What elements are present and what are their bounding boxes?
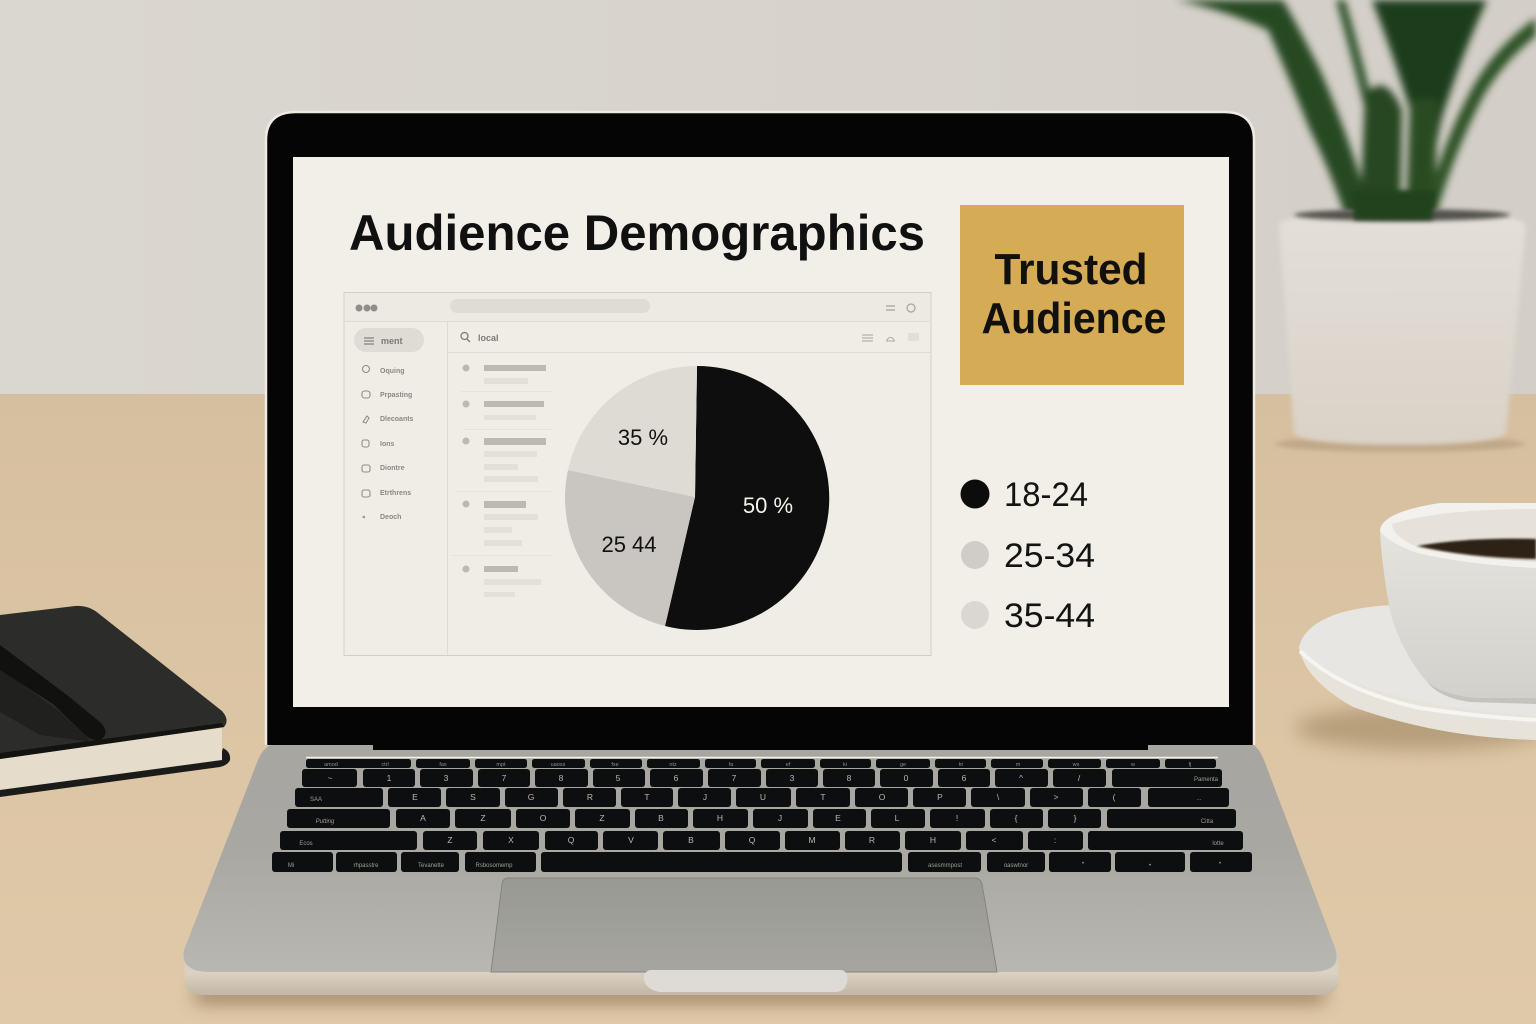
key legends: m — [1016, 762, 1021, 768]
key legends: ! — [956, 813, 958, 823]
sidebar items: Etrthrens — [380, 490, 411, 497]
sidebar items: Ions — [380, 441, 394, 448]
shift key row — [280, 831, 1243, 850]
key legends: mpt — [496, 762, 506, 768]
potted plant — [1176, 0, 1536, 452]
key legends: Ecos — [299, 841, 313, 847]
key legends: O — [879, 792, 886, 802]
pot shadow on desk — [1275, 436, 1525, 452]
key legends: P — [937, 792, 943, 802]
cup body — [1380, 530, 1536, 698]
key legends: fa — [729, 762, 734, 768]
pie chart: 25 44 — [601, 532, 657, 557]
key legends: V — [628, 835, 634, 845]
coffee cup and saucer — [1295, 503, 1536, 750]
trackpad front notch — [644, 970, 847, 992]
key legends: B — [688, 835, 694, 845]
plant stems at soil — [1352, 190, 1436, 220]
key legends: 8 — [559, 773, 564, 783]
key legends: ntz — [669, 762, 677, 768]
key legends: E — [412, 792, 418, 802]
key legends: } — [1074, 813, 1077, 823]
wooden desk surface — [0, 394, 1536, 1024]
pie chart: 35 % — [618, 425, 668, 450]
key legends: 6 — [962, 773, 967, 783]
key legends: 3 — [444, 773, 449, 783]
legend item 18-24: 18-24 — [1004, 476, 1088, 514]
toolbar icons — [886, 304, 915, 312]
badge: Trusted Audience: Trusted — [994, 245, 1148, 294]
key legends: { — [1015, 813, 1018, 823]
key legends: X — [508, 835, 514, 845]
badge: Trusted Audience — [960, 205, 1184, 385]
sidebar menu — [354, 328, 424, 352]
key legends: w — [1130, 762, 1135, 768]
key legends: rhpasstre — [353, 863, 379, 869]
plant leaves — [1176, 0, 1536, 220]
key legends: 7 — [732, 773, 737, 783]
key legends: • — [1082, 861, 1084, 867]
saucer underside — [1299, 605, 1536, 740]
sidebar items: Deoch — [380, 514, 401, 521]
key legends: uaoss — [551, 762, 566, 768]
slice: 35-44 — [568, 366, 697, 497]
coffee — [1417, 539, 1536, 559]
key legends: > — [1054, 792, 1059, 802]
key legends: Rsbosomemp — [475, 863, 513, 869]
key legends: E — [835, 813, 841, 823]
key legends: Z — [447, 835, 453, 845]
slice: 18-24 — [665, 366, 829, 630]
notebook lower cover — [0, 748, 230, 797]
key legends: fas — [439, 762, 447, 768]
search bar: local — [478, 333, 499, 343]
key legends: < — [992, 835, 997, 845]
badge: Trusted Audience: Audience — [982, 294, 1166, 343]
panel: faded app window — [344, 292, 931, 656]
key legends: B — [658, 813, 664, 823]
key legends: ^ — [1019, 773, 1023, 783]
laptop screen — [293, 157, 1229, 707]
pie chart: 50 % — [743, 493, 793, 518]
sidebar items: Dlecoants — [380, 416, 414, 423]
key legends: J — [778, 813, 782, 823]
address bar — [450, 299, 650, 313]
legend item 35-44 — [961, 597, 1095, 635]
function key row — [306, 759, 1216, 768]
key legends: fxe — [611, 762, 619, 768]
key legends: Z — [599, 813, 605, 823]
key legends: ws — [1072, 762, 1080, 768]
bottom key row — [272, 852, 1252, 872]
qwerty key row — [295, 788, 1229, 807]
key legends — [288, 762, 1224, 869]
key legends: ... — [1196, 796, 1202, 802]
legend item 18-24 — [960, 476, 1088, 514]
sidebar items: Prpasting — [380, 392, 412, 399]
home key row — [287, 809, 1236, 828]
key legends: : — [1054, 835, 1056, 845]
key legends: amod — [324, 762, 338, 768]
key legends: tri — [959, 762, 963, 768]
key legends: R — [587, 792, 593, 802]
wall background — [0, 0, 1536, 396]
legend item 35-44: 35-44 — [1004, 597, 1095, 635]
saucer shadow — [1295, 706, 1536, 750]
key legends: M — [808, 835, 816, 845]
key legends: ctrl — [381, 762, 389, 768]
cup contact shadow — [1427, 682, 1536, 704]
key legends: 1 — [387, 773, 392, 783]
key legends: Q — [749, 835, 756, 845]
key legends: Citta — [1201, 819, 1214, 825]
key legends: oaswtnor — [1004, 863, 1028, 869]
key legends: ( — [1113, 792, 1116, 802]
sidebar items — [362, 366, 414, 521]
key legends: asesmmpost — [928, 863, 962, 869]
laptop shadow — [195, 988, 1325, 1002]
key legends: / — [1078, 773, 1081, 783]
key legends: ge — [900, 762, 906, 768]
trackpad — [491, 878, 997, 972]
laptop lid — [266, 112, 1254, 750]
notebook pages — [0, 728, 222, 790]
key legends: L — [895, 813, 900, 823]
saucer lip — [1300, 651, 1536, 720]
pen — [0, 645, 105, 742]
keyboard — [272, 758, 1252, 872]
key legends: Mi — [288, 863, 294, 869]
legend item 25-34 — [961, 537, 1095, 575]
key legends: Q — [568, 835, 575, 845]
legend item 25-34: 25-34 — [1004, 537, 1095, 575]
key legends: 6 — [674, 773, 679, 783]
laptop base — [184, 745, 1339, 995]
notebook with pen — [0, 606, 230, 797]
key legends: Putting — [316, 819, 335, 825]
saucer surface — [1299, 605, 1536, 716]
sidebar items: Diontre — [380, 465, 405, 472]
notebook cover — [0, 606, 227, 759]
title: Audience Demographics — [349, 205, 925, 261]
key legends: ~ — [328, 773, 333, 783]
pie chart — [565, 366, 829, 630]
slice: 25-34 — [565, 470, 695, 626]
key legends: lotte — [1212, 841, 1224, 847]
window control dots — [356, 304, 378, 312]
base deck — [184, 745, 1337, 972]
key legends: G — [528, 792, 534, 802]
legend — [960, 476, 1095, 635]
key legends: 5 — [616, 773, 621, 783]
key legends: Z — [480, 813, 486, 823]
key legends: • — [1219, 861, 1221, 867]
key legends: 7 — [502, 773, 507, 783]
cup rim — [1380, 503, 1536, 568]
sidebar items: Oquing — [380, 368, 404, 375]
search bar — [461, 332, 919, 343]
key legends: 3 — [790, 773, 795, 783]
sidebar menu: ment — [381, 336, 403, 346]
key legends: 8 — [847, 773, 852, 783]
key legends: S — [470, 792, 476, 802]
key legends: R — [869, 835, 875, 845]
key legends: ef — [786, 762, 791, 768]
key legends: O — [540, 813, 547, 823]
key legends: \ — [997, 792, 1000, 802]
white plant pot — [1279, 210, 1526, 445]
key legends: U — [760, 792, 766, 802]
key legends: H — [717, 813, 723, 823]
base front edge — [184, 950, 1339, 995]
key legends: A — [420, 813, 426, 823]
key legends: Pamenta — [1194, 777, 1219, 783]
cup inner wall — [1392, 509, 1536, 562]
pot soil — [1294, 209, 1510, 221]
list rows — [451, 364, 552, 597]
laptop — [184, 112, 1339, 1002]
key legends: T — [644, 792, 650, 802]
key legends: T — [820, 792, 826, 802]
keyboard top highlight — [306, 756, 1218, 758]
key legends: J — [703, 792, 707, 802]
key legends: Tevanette — [418, 863, 445, 869]
key legends: SAA — [310, 797, 322, 803]
number key row — [302, 769, 1222, 787]
key legends: 0 — [904, 773, 909, 783]
sidebar divider — [345, 321, 930, 655]
key legends: fj — [1189, 762, 1191, 768]
key legends: • — [1149, 863, 1151, 869]
key legends: H — [930, 835, 936, 845]
key legends: ki — [843, 762, 847, 768]
